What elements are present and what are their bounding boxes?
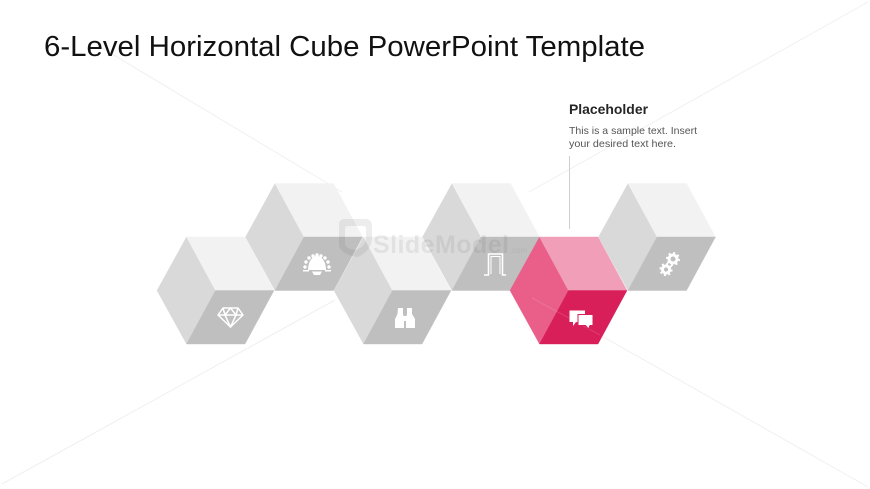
- text block: placeholder callout: [569, 101, 700, 150]
- cube 6: gears: [598, 184, 716, 290]
- watermark: SlideModel: [373, 231, 509, 259]
- callout body: This is a sample text. Insert: [569, 125, 697, 137]
- cube 3: binoculars: [334, 237, 451, 344]
- cube 1: diamond: [157, 237, 274, 344]
- faint line across pink cube: [532, 298, 600, 335]
- watermark: [339, 219, 528, 259]
- icon: speech bubbles: [570, 310, 593, 329]
- callout heading: Placeholder: [569, 101, 649, 117]
- icon: binoculars: [395, 308, 415, 328]
- cube 4: door: [422, 184, 540, 290]
- icon: diamond: [218, 308, 243, 327]
- cube 5: highlighted pink: [510, 237, 627, 344]
- icon: laurel and dome: [303, 253, 331, 275]
- callout connector line: [568, 156, 570, 229]
- callout body: your desired text here.: [569, 138, 676, 150]
- cube 2: laurel: [246, 184, 362, 290]
- icon: door: [484, 254, 506, 275]
- watermark: .com: [510, 246, 528, 255]
- icon: gears: [660, 253, 679, 275]
- title: 6-Level Horizontal Cube PowerPoint Template: [44, 31, 645, 63]
